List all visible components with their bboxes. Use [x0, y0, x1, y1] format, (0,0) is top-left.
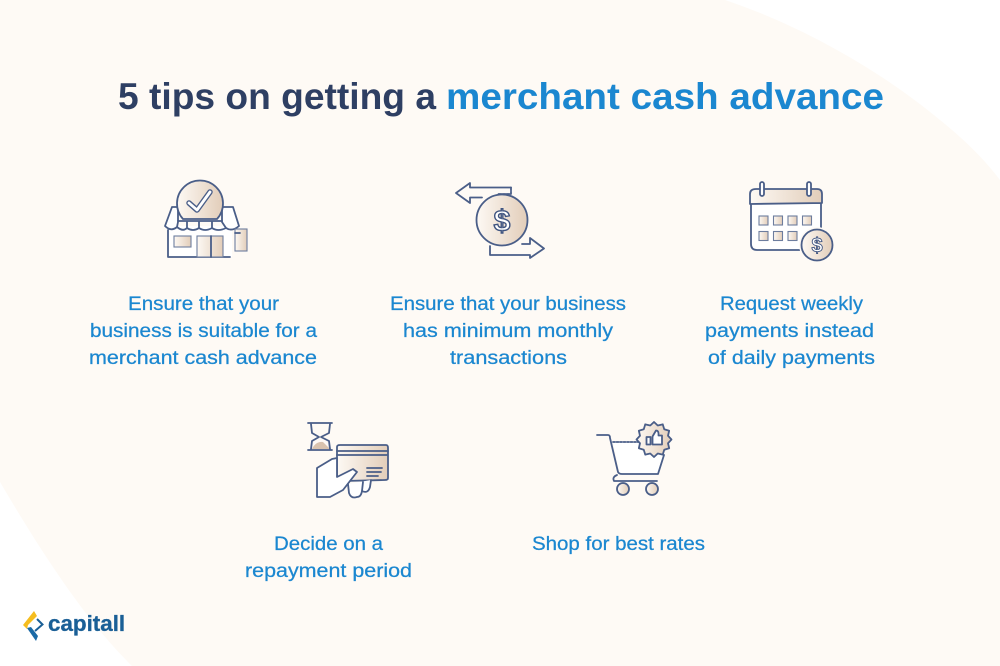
panel: tip 5 best rates: [532, 422, 705, 555]
text: tip 2: transactions: [450, 348, 567, 369]
icon: logo mark: [23, 611, 42, 641]
text: tip 3: of daily payments: [708, 348, 875, 369]
title: merchant cash advance: [446, 76, 884, 117]
text: tip 2: has minimum monthly: [403, 321, 614, 342]
text: tip 3: payments instead: [705, 321, 874, 342]
panel: tip 2 monthly transactions: [390, 183, 626, 369]
text: tip 4: [245, 534, 412, 582]
text: tip 2: [390, 294, 626, 369]
panel: tip 3 weekly payments: [705, 182, 875, 369]
icon: storefront with check: [165, 181, 247, 257]
text: tip 1: [89, 294, 317, 369]
icon: shopping cart with thumbs-up badge: [597, 422, 672, 495]
icon: calendar with coin: [750, 182, 835, 263]
text: tip 1: business is suitable for a: [90, 321, 317, 342]
icon: dollar coin with arrows: [456, 183, 544, 258]
text: tip 3: Request weekly: [720, 294, 864, 315]
icon: calendar with coin: $: [811, 235, 823, 257]
text: tip 1: merchant cash advance: [89, 348, 317, 369]
panel: tip 1 suitable business: [89, 181, 317, 369]
title: 5 tips on getting a: [118, 76, 436, 117]
text: tip 3: [705, 294, 875, 369]
panel: tip 4 repayment period: [245, 423, 412, 582]
text: tip 2: Ensure that your business: [390, 294, 626, 315]
text: tip 5: Shop for best rates: [532, 534, 705, 555]
title: [118, 76, 884, 117]
logo: capitall: [23, 611, 125, 641]
logo wordmark: capitall: [48, 611, 125, 636]
text: tip 4: Decide on a: [274, 534, 383, 555]
text: tip 4: repayment period: [245, 561, 412, 582]
icon: dollar coin with arrows: $: [494, 205, 511, 238]
text: tip 1: Ensure that your: [128, 294, 280, 315]
icon: hand with card and hourglass: [308, 423, 388, 498]
